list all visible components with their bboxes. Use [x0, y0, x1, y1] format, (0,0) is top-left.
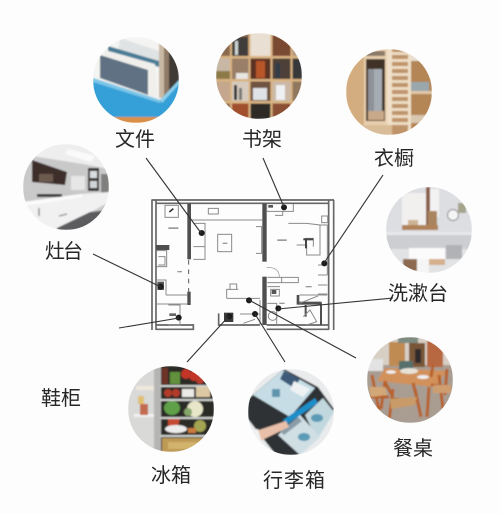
photo: files in blue box [93, 37, 179, 123]
photo: fridge [128, 366, 214, 452]
label: 鞋柜: 鞋柜 [41, 387, 81, 410]
connector lines [93, 158, 393, 362]
photo: washstand [386, 187, 472, 273]
label: 书架: 书架 [242, 128, 282, 151]
photo: dining table [367, 337, 453, 423]
floor plan [152, 199, 334, 330]
connector end dots [158, 204, 327, 321]
label: 餐桌: 餐桌 [393, 437, 433, 460]
photo: kitchen [23, 144, 109, 230]
label: 洗漱台: 洗漱台 [388, 282, 448, 305]
photo: suitcase [248, 369, 334, 455]
photo: bookshelf [216, 33, 302, 119]
label: 行李箱: 行李箱 [263, 469, 325, 492]
photo: wardrobe [346, 49, 432, 135]
label: 文件: 文件 [115, 128, 155, 151]
label: 冰箱: 冰箱 [151, 464, 191, 487]
label: 灶台: 灶台 [45, 240, 83, 263]
label: 衣橱: 衣橱 [374, 147, 414, 170]
dashed sliding door [187, 260, 190, 293]
